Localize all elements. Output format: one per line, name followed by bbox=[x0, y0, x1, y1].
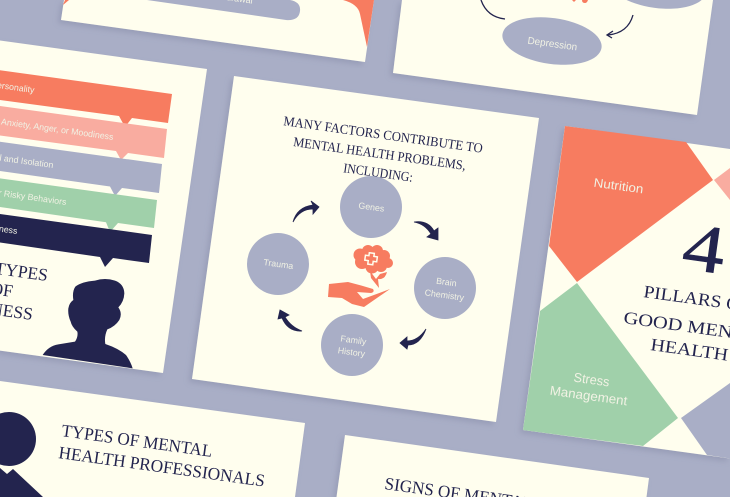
node: depression bbox=[499, 11, 605, 71]
node: family history: Family bbox=[340, 333, 368, 347]
panel: cycle slide, top right bbox=[393, 0, 713, 115]
node: genes bbox=[340, 176, 402, 238]
arrow: trauma to genes bbox=[293, 201, 319, 222]
panel: many factors slide, center bbox=[192, 76, 539, 422]
panel: warning signs slide, left bbox=[0, 40, 207, 373]
icon: brain in hand bbox=[328, 245, 393, 307]
node: brain chemistry: Brain bbox=[436, 276, 457, 288]
node: brain chemistry bbox=[414, 257, 476, 319]
bar: sadness bbox=[0, 214, 152, 267]
icon: professional avatar bbox=[0, 412, 43, 497]
panel: mental health professionals slide, bottom left bbox=[0, 381, 305, 497]
heading: types of illness bbox=[0, 258, 49, 324]
heading: types of mental health professionals bbox=[57, 420, 266, 491]
orange corner shape, right bbox=[343, 0, 374, 47]
section: stress management: Stress bbox=[573, 370, 611, 390]
arrow into upper left bbox=[481, 0, 505, 19]
section: pink pillar bbox=[714, 168, 730, 200]
heading: types of mental health professionals: HEALTH PROFESSIONALS bbox=[57, 442, 266, 491]
brain stem bbox=[370, 271, 387, 288]
heading: types of mental health professionals: TYPES OF MENTAL bbox=[60, 420, 214, 461]
brain bbox=[354, 245, 393, 274]
pill: withdrawal bbox=[147, 0, 300, 20]
section: stress management bbox=[523, 283, 678, 446]
arrow into depression bbox=[607, 15, 633, 38]
panel: four pillars slide, right bbox=[523, 126, 730, 458]
panel: withdrawal slide, top left bbox=[61, 0, 374, 62]
icon fragment bbox=[572, 0, 588, 3]
heading: many factors bbox=[283, 113, 484, 185]
upper node bbox=[604, 0, 710, 15]
arrow: genes to brain chemistry bbox=[414, 222, 438, 240]
node: depression: Depression bbox=[527, 36, 578, 53]
section: nutrition: Nutrition bbox=[593, 176, 644, 196]
node: family history: History bbox=[337, 345, 366, 359]
node: brain chemistry: Chemistry bbox=[424, 287, 465, 303]
heading: pillars of good mental health bbox=[622, 281, 730, 365]
bar: risky behaviors bbox=[0, 178, 157, 232]
section: lavender pillar bbox=[681, 383, 730, 458]
heading: pillars of good mental health: HEALTH bbox=[649, 334, 730, 365]
hand bbox=[328, 282, 390, 307]
node: genes: Genes bbox=[358, 200, 386, 214]
number four: 4 bbox=[678, 208, 730, 289]
orange corner shape, left bbox=[63, 0, 69, 5]
node: trauma bbox=[247, 233, 309, 295]
bar: isolation bbox=[0, 142, 162, 196]
section: stress management: Management bbox=[549, 383, 629, 408]
panel: signs of mental illness slide, bottom center bbox=[336, 435, 649, 497]
heading: many factors: MENTAL HEALTH PROBLEMS, bbox=[292, 134, 467, 173]
bar: anxiety: Anxiety, Anger, or Moodiness bbox=[1, 117, 115, 142]
node: trauma: Trauma bbox=[263, 257, 294, 271]
icon: person silhouette bbox=[43, 279, 133, 368]
node: family history bbox=[321, 314, 383, 376]
arrow: family history to trauma bbox=[278, 310, 302, 331]
bar: personality bbox=[0, 70, 172, 127]
heading: many factors: INCLUDING: bbox=[342, 160, 414, 185]
medical cross bbox=[364, 252, 378, 265]
bar: anxiety bbox=[0, 106, 167, 160]
arrow: brain chemistry to family history bbox=[400, 329, 426, 349]
heading: many factors: MANY FACTORS CONTRIBUTE TO bbox=[283, 113, 484, 156]
section: nutrition bbox=[549, 126, 713, 282]
